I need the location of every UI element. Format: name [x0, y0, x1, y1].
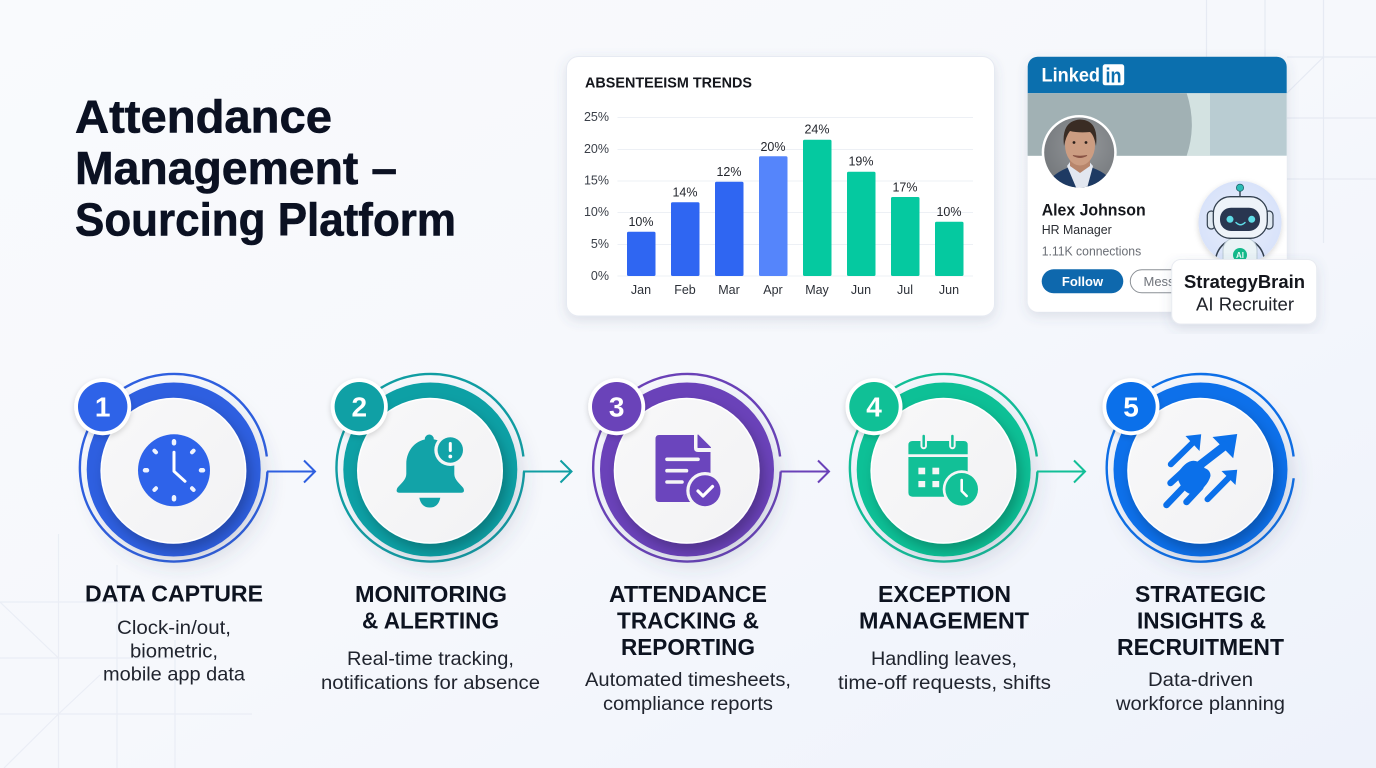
step 4 caption: MANAGEMENT: [859, 608, 1030, 634]
step 5: strategic insights and recruitment: [1102, 374, 1294, 562]
step 3: attendance tracking and reporting: [588, 374, 829, 562]
bar values: 10%: [936, 205, 962, 219]
y axis labels: 25%: [584, 110, 609, 124]
ring graphic 2: [336, 374, 524, 562]
ring graphic 1: [80, 374, 267, 562]
icon: rising arrows: [1166, 434, 1237, 505]
icon: calendar with clock: [908, 436, 981, 508]
step 2 caption: MONITORING: [355, 581, 507, 607]
message button: [1130, 270, 1200, 293]
step 3 caption: [585, 581, 791, 715]
bar values: 24%: [804, 123, 830, 137]
bar values: 19%: [848, 154, 874, 168]
panel: LinkedIn profile card: [1028, 57, 1287, 312]
arrow 1 to 2: [267, 460, 315, 482]
title: Management –: [75, 142, 397, 194]
step 3 caption: compliance reports: [603, 693, 773, 715]
chart title: ABSENTEEISM TRENDS: [585, 76, 752, 92]
LinkedIn header: in: [1106, 66, 1122, 88]
profile banner: [1028, 93, 1287, 156]
month labels: Jun: [939, 283, 959, 297]
number badge 2: 2: [352, 392, 367, 423]
y axis labels: 5%: [591, 237, 609, 251]
callout: StrategyBrain AI Recruiter: [1172, 260, 1317, 324]
profile role: HR Manager: [1042, 223, 1112, 237]
number badge 3: 3: [609, 392, 624, 423]
title: Attendance: [75, 90, 332, 142]
step 4: exception management: [846, 374, 1085, 562]
step 1 caption: [85, 581, 263, 686]
month labels: Jan: [631, 283, 651, 297]
ring graphic 3: [593, 374, 781, 562]
step 3 caption: TRACKING &: [617, 608, 759, 634]
message button: Message: [1144, 274, 1196, 289]
panel: absenteeism trends chart: [566, 56, 994, 316]
step 2 caption: [321, 581, 540, 694]
icon: clock: [138, 434, 210, 506]
step 2 caption: notifications for absence: [321, 672, 540, 694]
title: [75, 90, 456, 246]
number badge 1: 1: [95, 392, 110, 423]
bar values: 20%: [760, 140, 786, 154]
callout: StrategyBrain AI Recruiter: AI Recruiter: [1196, 294, 1294, 314]
bars: [627, 140, 964, 276]
step 2 caption: & ALERTING: [362, 608, 499, 634]
step 1 caption: Clock-in/out,: [117, 617, 231, 639]
step 3 caption: Automated timesheets,: [585, 669, 791, 691]
y axis labels: [584, 110, 609, 283]
callout: StrategyBrain AI Recruiter: StrategyBrain: [1184, 272, 1305, 292]
profile photo: [1042, 115, 1117, 188]
title: Sourcing Platform: [75, 194, 456, 246]
bar values: [628, 123, 962, 229]
number badge 5: 5: [1123, 392, 1139, 423]
number badge 3: [588, 378, 645, 435]
y axis labels: 10%: [584, 205, 609, 219]
step 5 caption: workforce planning: [1115, 693, 1285, 715]
LinkedIn header: Linked: [1042, 65, 1100, 87]
arrow 2 to 3: [523, 460, 572, 482]
step 5 caption: STRATEGIC: [1135, 581, 1266, 607]
step 3 caption: REPORTING: [621, 634, 755, 660]
arrow 3 to 4: [780, 460, 829, 482]
y axis labels: 20%: [584, 142, 609, 156]
month labels: May: [805, 283, 830, 297]
y axis labels: 0%: [591, 269, 609, 283]
month labels: Jul: [897, 283, 913, 297]
step 4 caption: [838, 581, 1051, 694]
number badge 2: [331, 378, 388, 435]
AI robot avatar: [1196, 181, 1284, 259]
bar values: 12%: [716, 165, 742, 179]
ring graphic 4: [850, 374, 1037, 562]
step 1 caption: mobile app data: [103, 664, 245, 686]
AI robot avatar: AI: [1236, 251, 1244, 260]
number badge 4: 4: [866, 392, 882, 423]
bar values: 17%: [892, 181, 918, 195]
icon: bell with alert: [397, 434, 466, 508]
step 3 caption: ATTENDANCE: [609, 581, 767, 607]
step 1: data capture: [74, 374, 315, 562]
month labels: Apr: [763, 283, 783, 297]
step 1 caption: DATA CAPTURE: [85, 581, 263, 607]
bar values: 10%: [628, 215, 654, 229]
number badge 5: [1102, 378, 1160, 435]
LinkedIn header: [1028, 57, 1287, 93]
number badge 4: [846, 378, 902, 435]
step 5 caption: INSIGHTS &: [1137, 608, 1266, 634]
step 5 caption: Data-driven: [1148, 669, 1253, 691]
y axis labels: 15%: [584, 174, 609, 188]
icon: document with check: [656, 435, 724, 509]
month labels: [631, 283, 959, 297]
month labels: Jun: [851, 283, 871, 297]
step 2 caption: Real-time tracking,: [347, 648, 514, 670]
ring graphic 5: [1107, 374, 1294, 562]
step 4 caption: Handling leaves,: [871, 648, 1017, 670]
connections: 1.11K connections: [1042, 244, 1141, 258]
follow button: Follow: [1062, 274, 1104, 289]
arrow 4 to 5: [1037, 460, 1085, 482]
step 1 caption: biometric,: [130, 640, 218, 662]
number badge 1: [74, 378, 131, 435]
step 5 caption: RECRUITMENT: [1117, 634, 1285, 660]
bar values: 14%: [672, 186, 698, 200]
step 4 caption: time-off requests, shifts: [838, 672, 1051, 694]
step 2: monitoring and alerting: [331, 374, 572, 562]
step 5 caption: [1115, 581, 1285, 715]
follow button: [1042, 269, 1123, 293]
month labels: Mar: [718, 283, 740, 297]
profile name: Alex Johnson: [1042, 202, 1146, 220]
month labels: Feb: [674, 283, 696, 297]
step 4 caption: EXCEPTION: [878, 581, 1011, 607]
